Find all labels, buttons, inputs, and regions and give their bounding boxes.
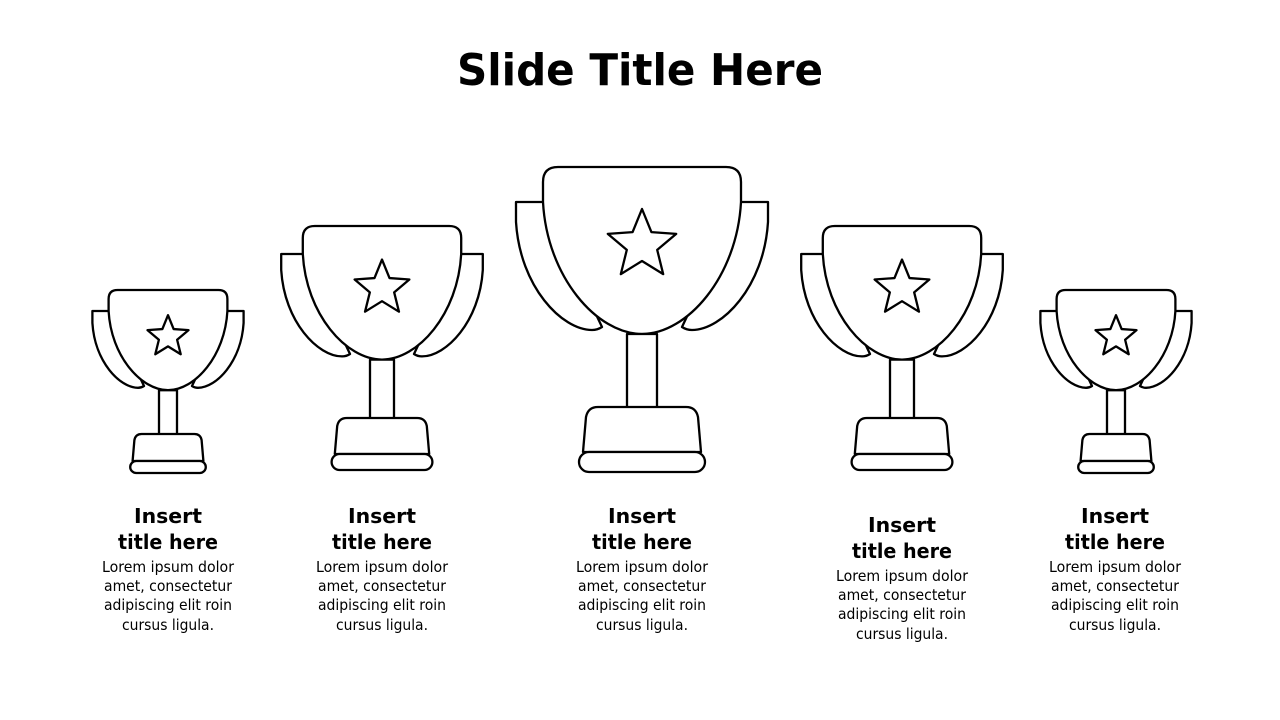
text block 1: title here: [118, 530, 218, 554]
text block 2: Lorem ipsum dolor: [316, 558, 449, 576]
text block 2: cursus ligula.: [336, 616, 428, 634]
text block 5: amet, consectetur: [1051, 577, 1180, 595]
icon: trophy 4: [801, 226, 1003, 470]
text block 4: amet, consectetur: [838, 586, 967, 604]
text block 2: adipiscing elit roin: [318, 596, 446, 614]
text block 4: Insert: [868, 513, 936, 537]
text block 2: Insert: [348, 504, 416, 528]
text block 1: cursus ligula.: [122, 616, 214, 634]
text block 5: Lorem ipsum dolor: [1049, 558, 1182, 576]
text block 2: [316, 504, 449, 634]
text block 3: Insert: [608, 504, 676, 528]
title: Slide Title Here: [457, 45, 823, 96]
text block 5: cursus ligula.: [1069, 616, 1161, 634]
text block 1: amet, consectetur: [104, 577, 233, 595]
text block 3: Lorem ipsum dolor: [576, 558, 709, 576]
text block 4: adipiscing elit roin: [838, 605, 966, 623]
text block 5: title here: [1065, 530, 1165, 554]
text block 3: cursus ligula.: [596, 616, 688, 634]
icon: trophy 1: [92, 290, 244, 473]
text block 3: [576, 504, 709, 634]
text block 2: title here: [332, 530, 432, 554]
icon: trophy 3 (center): [516, 167, 768, 472]
text block 4: title here: [852, 539, 952, 563]
text block 1: adipiscing elit roin: [104, 596, 232, 614]
icon: trophy 2: [281, 226, 483, 470]
text block 1: Lorem ipsum dolor: [102, 558, 235, 576]
text block 4: [836, 513, 969, 643]
text block 5: Insert: [1081, 504, 1149, 528]
text block 3: adipiscing elit roin: [578, 596, 706, 614]
text block 4: Lorem ipsum dolor: [836, 567, 969, 585]
icon: trophy 5: [1040, 290, 1192, 473]
text block 1: Insert: [134, 504, 202, 528]
text block 3: amet, consectetur: [578, 577, 707, 595]
text block 3: title here: [592, 530, 692, 554]
text block 1: [102, 504, 235, 634]
text block 5: [1049, 504, 1182, 634]
text block 5: adipiscing elit roin: [1051, 596, 1179, 614]
text block 2: amet, consectetur: [318, 577, 447, 595]
text block 4: cursus ligula.: [856, 625, 948, 643]
